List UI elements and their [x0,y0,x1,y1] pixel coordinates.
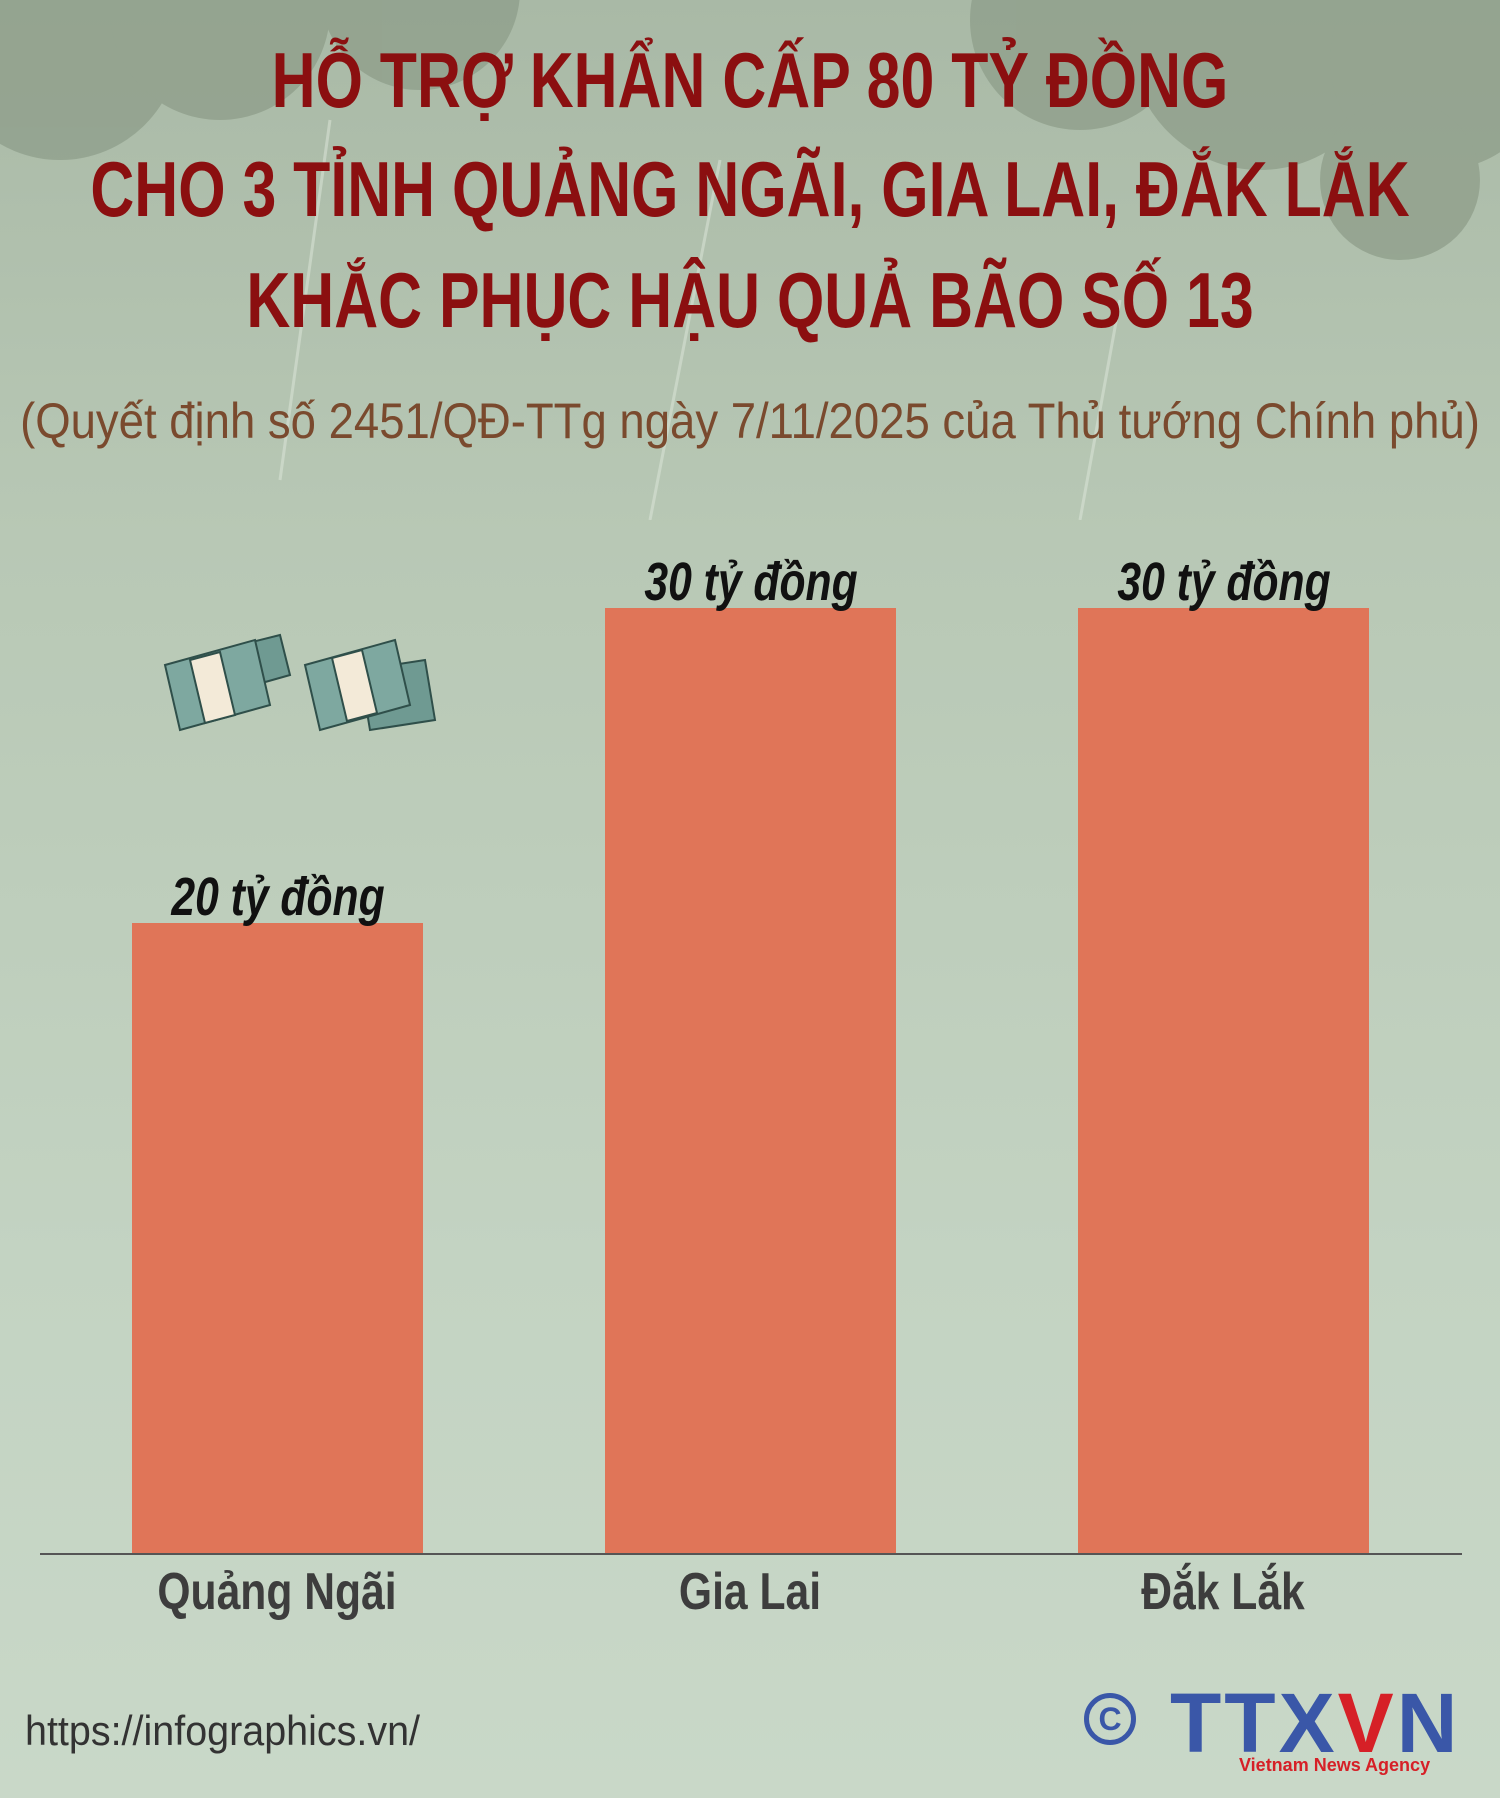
icon: money stacks [164,634,436,732]
category: Quảng Ngãi: Quảng Ngãi [157,1563,397,1621]
baseline [40,1553,1462,1555]
background clouds [0,0,1500,520]
bar: Gia Lai [605,608,896,1554]
title: KHẮC PHỤC HẬU QUẢ BÃO SỐ 13 [246,256,1254,344]
logo: TTXVN: Vietnam News Agency [1239,1755,1430,1775]
value label: 30 Gia Lai: 30 tỷ đồng [644,552,858,612]
url: https://infographics.vn/ [25,1707,420,1754]
bar: Đắk Lắk [1078,608,1369,1554]
category: Gia Lai: Gia Lai [679,1563,821,1621]
subtitle: (Quyết định số 2451/QĐ-TTg ngày 7/11/2025 của Thủ tướng Chính phủ) [20,393,1480,449]
logo: TTXVN: C [1098,1701,1122,1737]
value label: 20: 20 tỷ đồng [171,867,385,927]
logo: TTXVN: TTXVN [1170,1676,1460,1770]
title: HỖ TRỢ KHẨN CẤP 80 TỶ ĐỒNG [272,36,1228,124]
value label: 30 Đắk Lắk: 30 tỷ đồng [1117,552,1331,612]
title [90,36,1410,344]
bar: Quảng Ngãi [132,923,423,1554]
title: CHO 3 TỈNH QUẢNG NGÃI, GIA LAI, ĐẮK LẮK [90,145,1410,233]
category: Đắk Lắk: Đắk Lắk [1141,1563,1305,1621]
